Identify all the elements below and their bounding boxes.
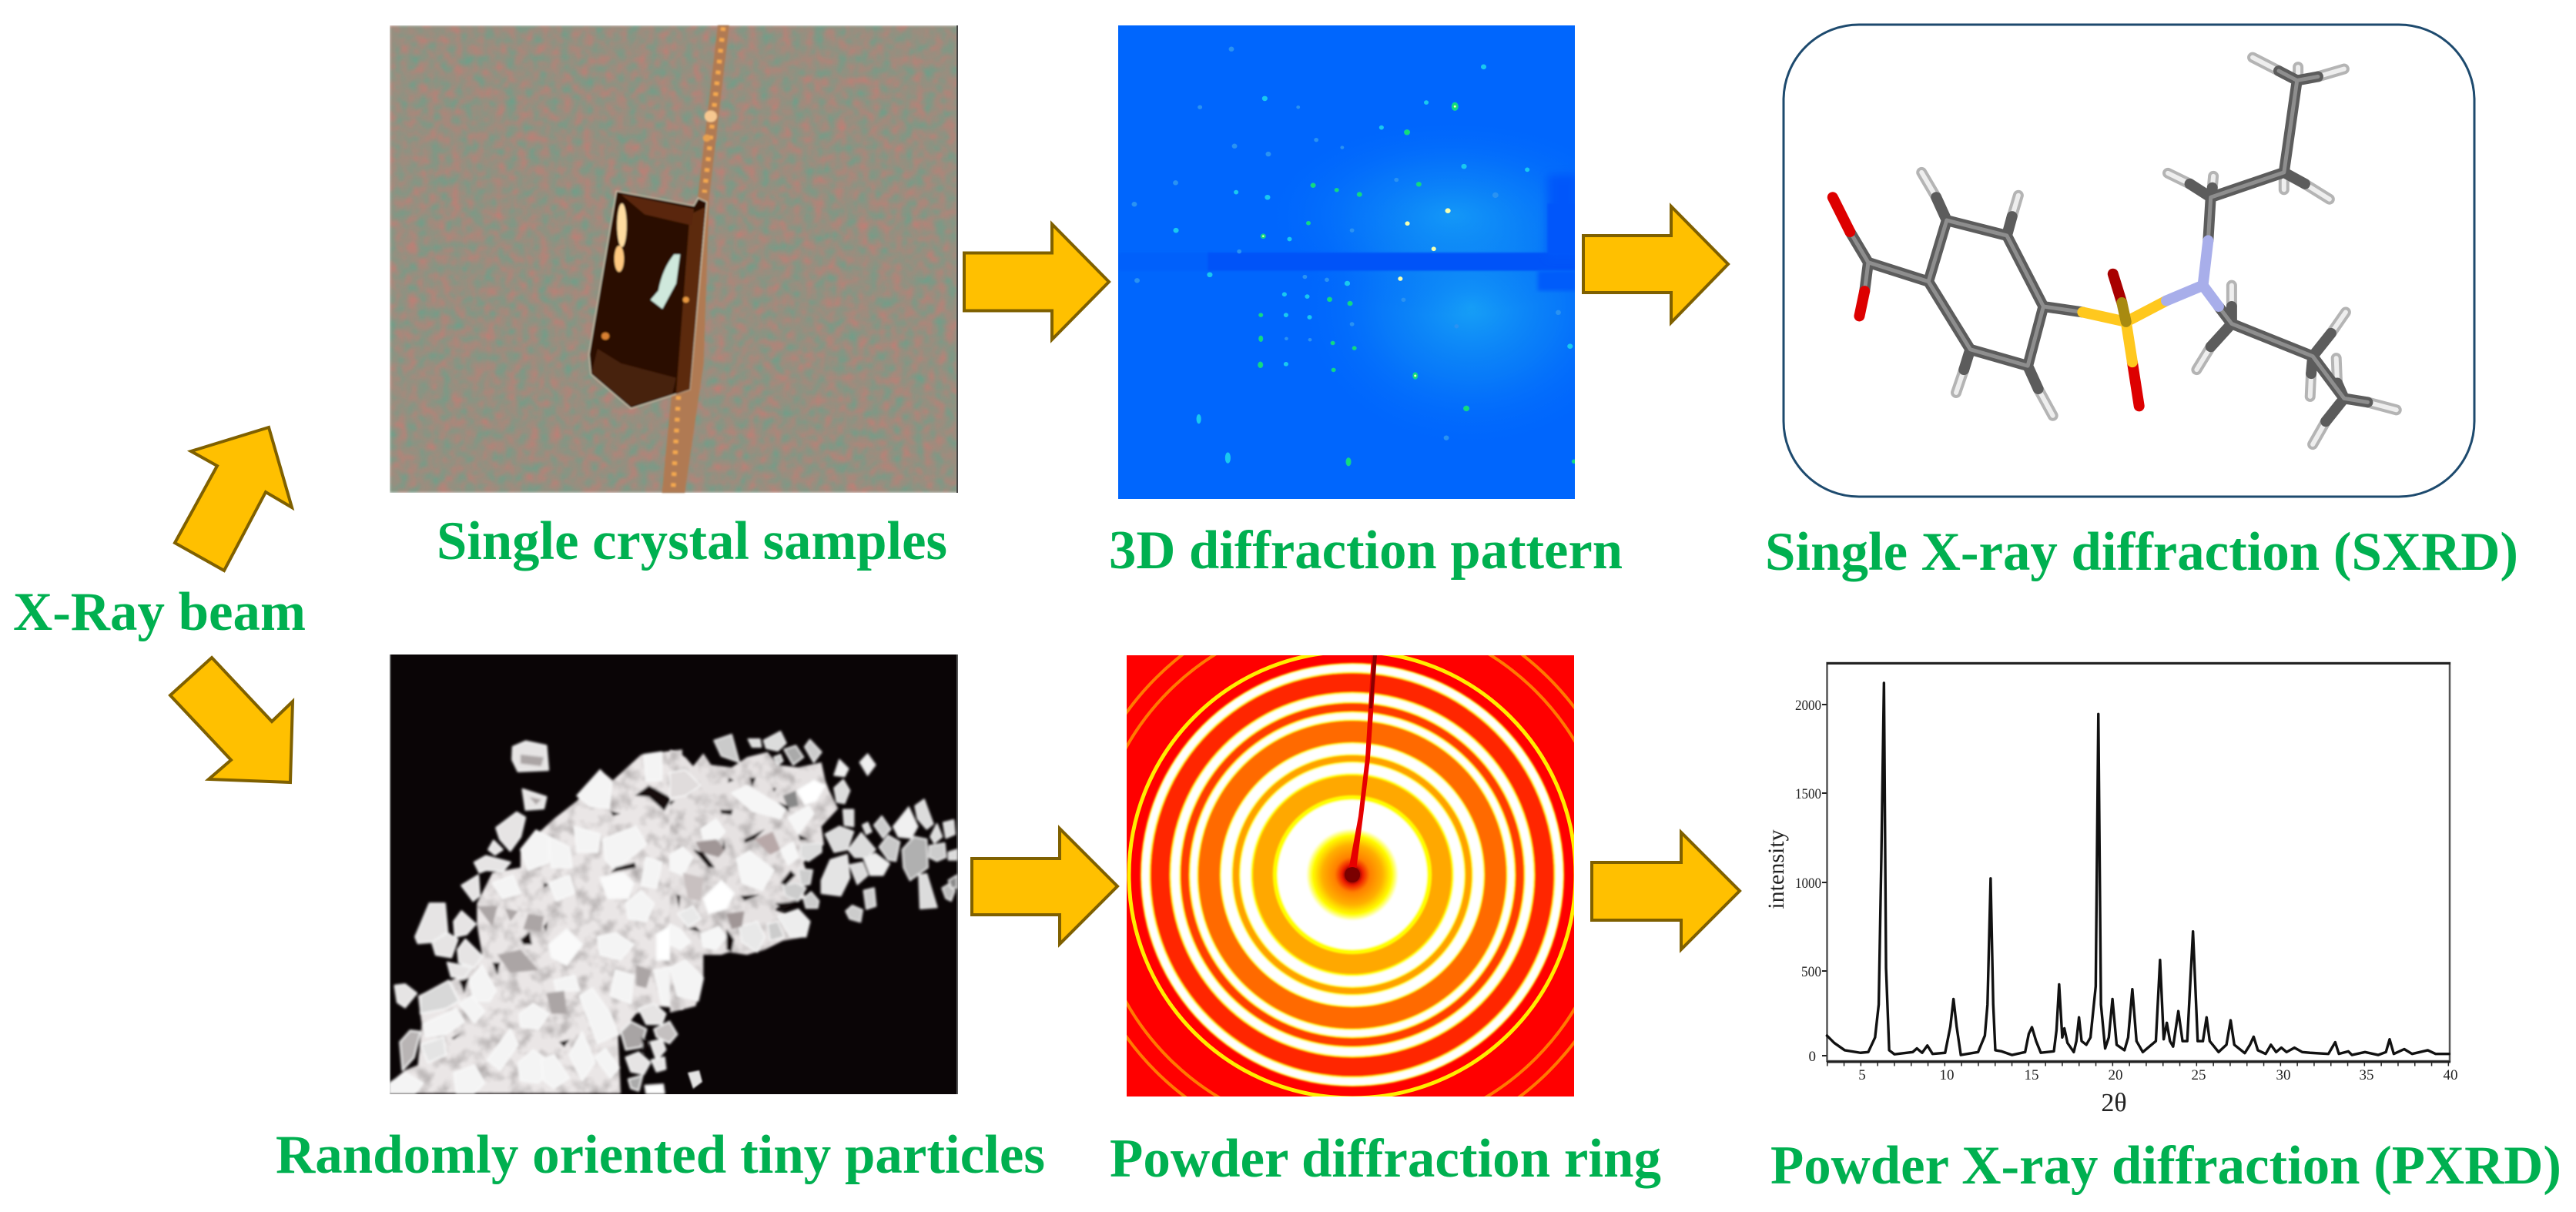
y axis tick labels: 500 xyxy=(1801,964,1821,980)
x axis tick labels: 5 xyxy=(1858,1067,1866,1083)
crystal pile, right part xyxy=(670,732,957,1013)
arrow: beam to particles xyxy=(170,658,293,782)
panel: molecular structure from SXRD xyxy=(1784,25,2474,497)
arrow: diffraction pattern to SXRD xyxy=(1583,206,1728,323)
crystal pile, left part xyxy=(390,742,682,1093)
carbon skeleton xyxy=(1850,71,2367,421)
label: single crystal samples: Single crystal samples xyxy=(437,511,947,571)
y axis title: intensity xyxy=(1764,829,1789,909)
panel: powder diffraction rings xyxy=(1127,655,1574,1096)
hydrogen bonds xyxy=(1921,58,2397,444)
label: single X-ray diffraction: Single X-ray diffraction (SXRD) xyxy=(1765,522,2518,582)
y axis tick labels: 2000 xyxy=(1795,698,1821,714)
y axis tick labels: 1000 xyxy=(1795,876,1821,892)
arrow: powder ring to PXRD xyxy=(1592,832,1740,949)
x axis tick labels: 10 xyxy=(1939,1067,1955,1083)
y axis tick labels: 0 xyxy=(1808,1049,1816,1065)
oxygen bonds xyxy=(1833,197,2139,406)
arrow: beam to single crystal xyxy=(175,427,292,571)
y axis tick labels xyxy=(1795,698,1821,1065)
panel: 3D diffraction pattern xyxy=(1118,25,1575,499)
diffraction spots xyxy=(1132,47,1576,466)
crystal body xyxy=(589,191,707,408)
arrow: particles to powder ring xyxy=(972,829,1117,944)
diffraction trace xyxy=(1827,683,2449,1055)
y axis tick labels: 1500 xyxy=(1795,786,1821,802)
beam stop xyxy=(1345,655,1377,882)
label: powder X-ray diffraction: Powder X-ray diffraction (PXRD) xyxy=(1770,1136,2561,1196)
arrow: crystal to diffraction pattern xyxy=(964,224,1109,340)
x axis tick labels: 25 xyxy=(2192,1067,2206,1083)
x axis tick labels: 30 xyxy=(2276,1067,2290,1083)
panel: single crystal sample photo xyxy=(390,25,958,493)
x axis title: 2θ xyxy=(2101,1089,2127,1117)
x axis tick labels xyxy=(1858,1067,2458,1083)
label: randomly oriented tiny particles: Randomly oriented tiny particles xyxy=(276,1125,1045,1185)
mounting fibre xyxy=(662,25,729,493)
label: X-Ray beam: X-Ray beam xyxy=(13,582,306,642)
label: 3D diffraction pattern: 3D diffraction pattern xyxy=(1109,521,1623,581)
sulfonyl and nitrogen bonds xyxy=(2082,240,2219,362)
x axis tick labels: 40 xyxy=(2443,1067,2458,1083)
chart: PXRD pattern xyxy=(1764,663,2458,1117)
x axis tick labels: 15 xyxy=(2024,1067,2039,1083)
x axis tick labels: 35 xyxy=(2360,1067,2373,1083)
label: powder diffraction ring: Powder diffraction ring xyxy=(1110,1129,1661,1189)
plot frame xyxy=(1822,663,2450,1064)
panel: randomly oriented particles photo xyxy=(390,655,958,1094)
x axis tick labels: 20 xyxy=(2109,1067,2122,1083)
